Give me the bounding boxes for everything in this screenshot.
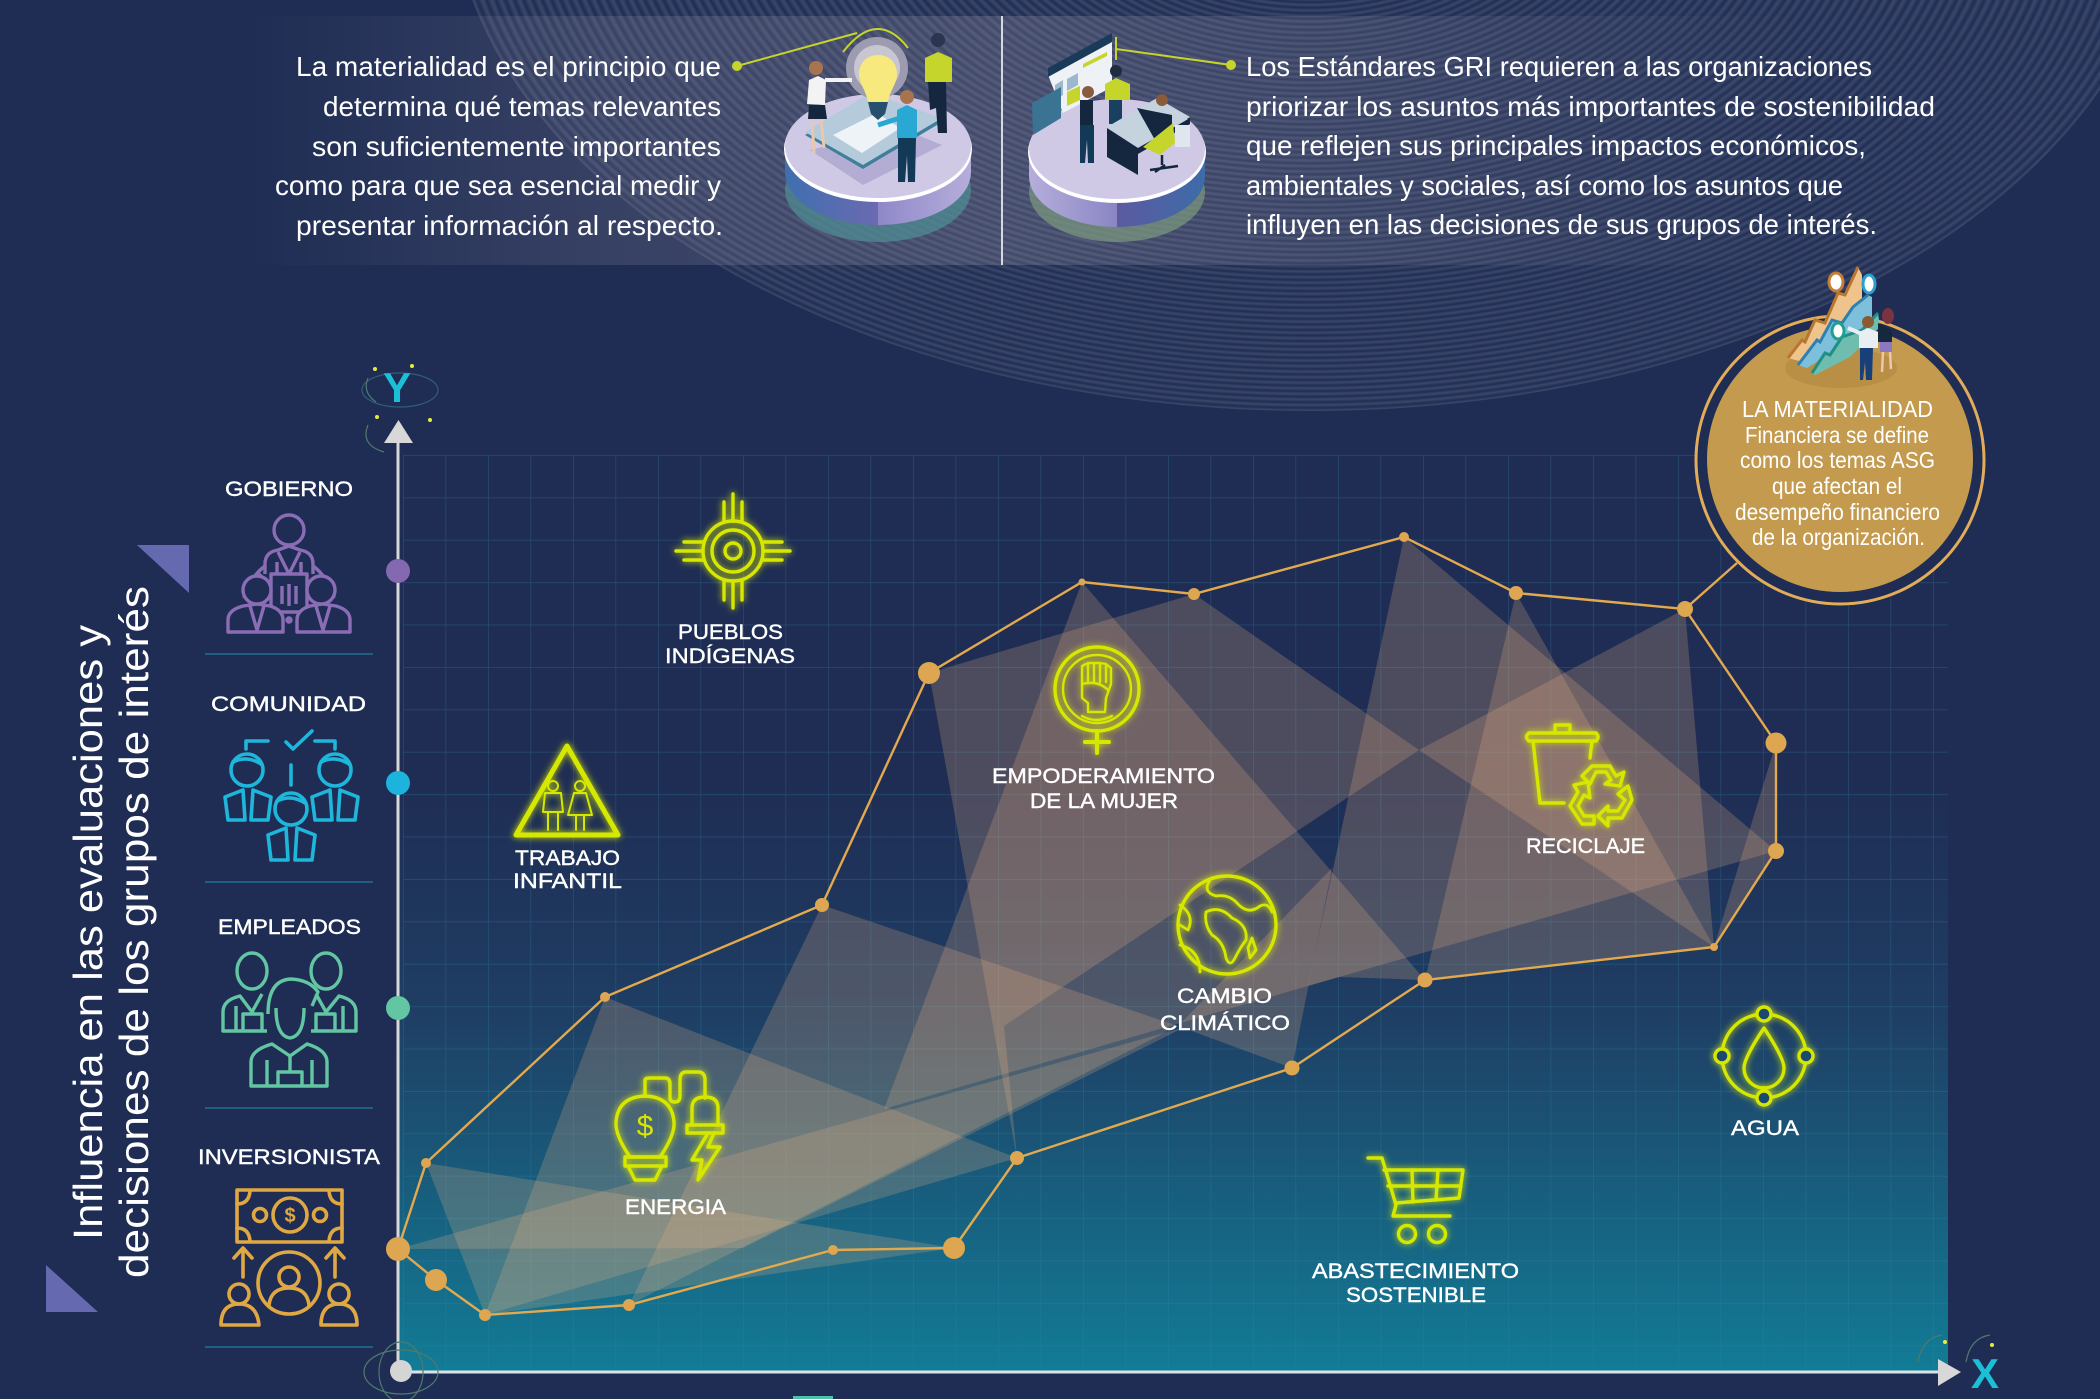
icon: gobierno [228,515,350,632]
icon: empleados [223,953,356,1086]
top band behind intro text [0,16,2100,265]
stakeholder label: empleados: EMPLEADOS [218,916,361,939]
icon: comunidad [225,731,358,860]
axis letter Y with orbit [362,364,438,452]
topic: abastecimiento sostenible: SOSTENIBLE [1346,1284,1486,1307]
topic: trabajo infantil: TRABAJO [515,847,620,870]
intro text left: son suficientemente importantes [312,131,721,162]
origin with orbit rings [364,1342,438,1399]
axis title rotated [65,586,157,1278]
topic: reciclaje [1526,725,1645,858]
illustration: platform with lightbulb [784,29,972,242]
divider [205,881,373,883]
intro text left: La materialidad es el principio que [296,51,721,82]
topic: energia [616,1072,726,1219]
icon: shopping cart [1368,1158,1463,1242]
intro text right: influyen en las decisiones de sus grupos de interés. [1246,209,1877,240]
icon: earth globe [1178,876,1276,974]
icon: feminist fist [1055,647,1139,753]
connector: left dot line [732,33,857,71]
icon: recycling bin [1526,725,1632,826]
chart: network nodes [421,532,1786,1321]
stakeholder label: gobierno: GOBIERNO [225,478,353,501]
callout: gold circle: desempeño financiero [1735,499,1940,525]
chart: network outline [398,537,1776,1315]
topic: agua: AGUA [1731,1117,1799,1140]
intro text left [275,51,723,241]
icon: water drop [1715,1007,1813,1105]
divider [205,1107,373,1109]
topic: abastecimiento sostenible [1312,1158,1519,1307]
topic: pueblos indigenas [665,494,795,668]
axis marker: gobierno [386,559,410,583]
illustration: platform with office [1028,33,1206,242]
axis letter Y with orbit: Y [383,364,411,411]
topic: cambio climatico [1160,876,1290,1035]
callout: gold circle: como los temas ASG [1740,447,1935,473]
axis title rotated: Influencia en las evaluaciones y [65,624,111,1240]
stakeholder label: inversionista: INVERSIONISTA [198,1146,380,1169]
callout: gold circle [1696,316,1984,604]
axis marker: comunidad [386,771,410,795]
callout: gold circle: Financiera se define [1745,422,1929,448]
topic: pueblos indigenas: PUEBLOS [678,621,783,644]
axis letter X with orbit [1918,1335,1999,1397]
intro text left: determina qué temas relevantes [323,91,721,122]
intro text right [1246,51,1935,240]
topic: reciclaje: RECICLAJE [1526,835,1645,858]
connector to gold circle [1685,563,1737,609]
intro text left: presentar información al respecto. [296,210,723,241]
topic: agua [1715,1007,1813,1140]
Y axis with arrow [384,420,413,1372]
topic: pueblos indigenas: INDÍGENAS [665,645,795,668]
text: $ [284,1205,296,1227]
X axis with arrow [400,1359,1961,1386]
callout: gold circle: de la organización. [1752,524,1925,550]
panel: chart background [398,455,1948,1372]
icon: warning children [516,746,618,835]
icon: sun symbol [676,494,790,608]
decorative triangle bottom [46,1265,98,1312]
axis letter X with orbit: X [1971,1350,1999,1397]
connector: right dot line [1116,37,1236,70]
intro text right: priorizar los asuntos más importantes de sostenibilidad [1246,91,1935,122]
illustration: mountain chart with people [1788,267,1894,380]
divider between intro blocks [1001,16,1003,265]
divider [205,1346,373,1348]
topic: cambio climatico: CAMBIO [1177,985,1272,1008]
topic: empoderamiento de la mujer: DE LA MUJER [1030,790,1178,813]
intro text left: como para que sea esencial medir y [275,170,721,201]
callout: gold circle: LA MATERIALIDAD [1742,396,1933,422]
topic: cambio climatico: CLIMÁTICO [1160,1012,1290,1035]
topic: trabajo infantil: INFANTIL [513,870,622,893]
intro text right: Los Estándares GRI requieren a las organizaciones [1246,51,1872,82]
topic: abastecimiento sostenible: ABASTECIMIENTO [1312,1260,1519,1283]
topic: trabajo infantil [513,746,622,893]
topic: empoderamiento de la mujer: EMPODERAMIENTO [992,765,1215,788]
axis title rotated: decisiones de los grupos de interés [111,586,157,1278]
topic: empoderamiento de la mujer [992,647,1215,813]
topic: energia: $ [637,1110,654,1143]
icon: inversionista [221,1190,357,1325]
intro text right: ambientales y sociales, así como los asuntos que [1246,170,1843,201]
chart: translucent network wedges [398,537,1776,1315]
topic: energia: ENERGIA [625,1196,726,1219]
divider [205,653,373,655]
bottom cropped marker [793,1396,833,1399]
axis marker: empleados [386,996,410,1020]
decorative triangle top [137,545,189,593]
intro text right: que reflejen sus principales impactos económicos, [1246,130,1866,161]
stakeholder label: comunidad: COMUNIDAD [211,693,366,716]
axis marker: inversionista [386,1237,410,1261]
decorative swoosh of concentric arcs [472,0,2100,411]
callout: gold circle: que afectan el [1772,473,1902,499]
icon: bulb and plug [616,1072,723,1180]
